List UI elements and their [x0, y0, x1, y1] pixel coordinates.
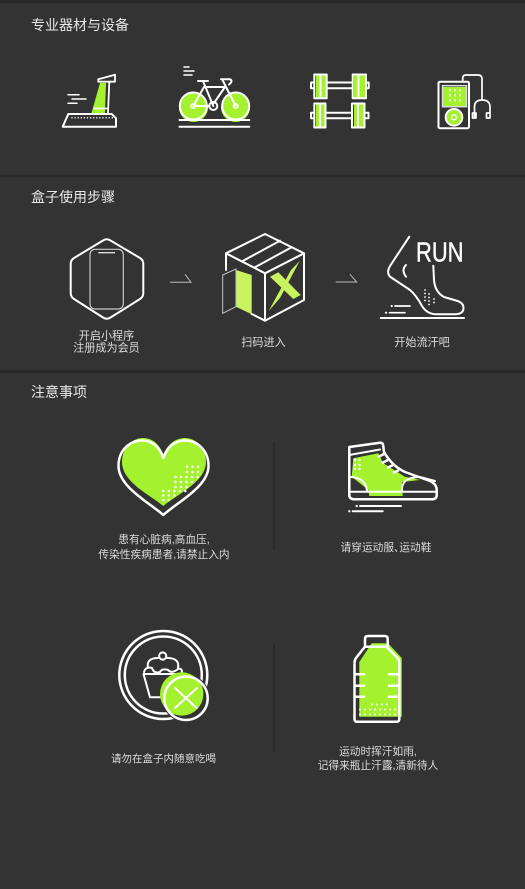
arrow: step 2 to step 3 — [336, 274, 357, 282]
heading: notes: 注意事项 — [31, 384, 87, 400]
step 3: running foot — [381, 236, 464, 318]
label: heart warning: 传染性疾病患者,请禁止入内 — [98, 548, 230, 561]
heading: equipment: 专业器材与设备 — [31, 17, 129, 33]
icon: no food — [119, 631, 210, 722]
arrow: step 1 to step 2 — [170, 274, 191, 282]
label: sneaker note: 请穿运动服、运动鞋 — [341, 541, 432, 554]
icon: sneaker — [348, 443, 437, 512]
icon: bicycle — [179, 67, 250, 127]
label: heart warning: 患有心脏病,高血压, — [118, 533, 210, 546]
label: step 2: 扫码进入 — [241, 336, 286, 349]
label: water note: 记得来瓶止汗露,清新待人 — [318, 759, 439, 772]
label: step 1: 开启小程序 — [79, 328, 134, 342]
icon: music player — [438, 75, 490, 128]
divider: notes row 1 — [273, 442, 275, 550]
heading: usage steps: 盒子使用步骤 — [31, 189, 115, 205]
label: no food note: 请勿在盒子内随意吃喝 — [111, 752, 216, 765]
divider: notes row 2 — [273, 645, 275, 752]
icon: heart — [118, 438, 208, 515]
icon: water bottle — [354, 636, 402, 722]
label: water note: 运动时挥汗如雨, — [339, 745, 417, 758]
step 1: phone in hexagon — [71, 239, 143, 319]
step 2: scan box — [223, 234, 304, 321]
step 3: running foot: RUN — [416, 236, 464, 268]
label: step 1: 注册成为会员 — [73, 340, 140, 354]
label: step 3: 开始流汗吧 — [394, 335, 450, 349]
icon: dumbbells — [311, 74, 369, 128]
icon: treadmill — [63, 75, 116, 127]
